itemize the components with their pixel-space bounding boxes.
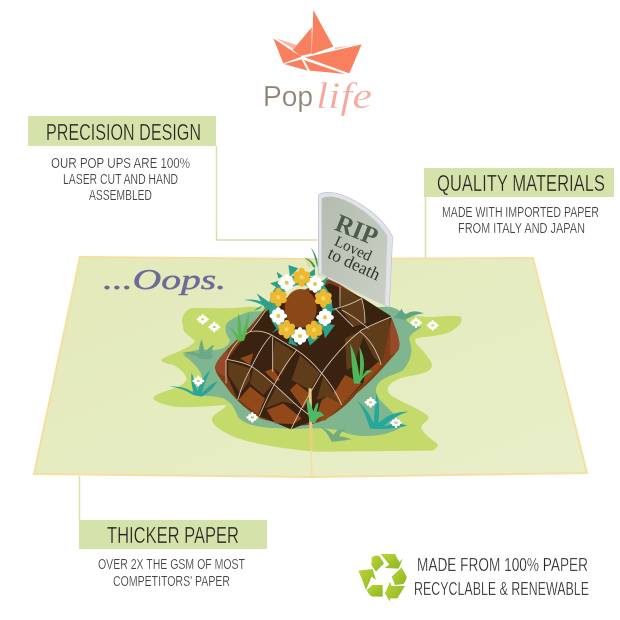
- grass behind stone: [304, 248, 318, 267]
- recycling text: [414, 555, 589, 599]
- green tuft on mound: [350, 343, 372, 384]
- teal tuft right: [357, 393, 408, 429]
- body text: OUR POP UPS ARE 100%: [51, 155, 190, 172]
- dirt cell walls: [227, 283, 392, 429]
- panel: quality materials: [424, 168, 614, 260]
- heading bar: [79, 520, 267, 549]
- wreath flowers: [278, 274, 295, 291]
- panel: thicker paper: [79, 476, 267, 590]
- icon: tombstone: [318, 192, 393, 307]
- grass: dark green blob: [183, 307, 422, 436]
- wordmark: life: [316, 76, 372, 117]
- leader line: [424, 197, 426, 260]
- tombstone inscription: Loved: [332, 233, 375, 265]
- tombstone inscription: [325, 209, 383, 284]
- dirt rim: [215, 317, 399, 377]
- icon: grass tufts: [169, 299, 424, 442]
- wordmark: [263, 76, 372, 117]
- body text: OVER 2X THE GSM OF MOST: [98, 556, 245, 573]
- dirt mound base: [215, 278, 399, 425]
- grass: light green blob: [154, 307, 462, 452]
- card base: [34, 257, 587, 477]
- body text: LASER CUT AND HAND: [63, 171, 178, 188]
- teal tuft behind wreath: [244, 299, 265, 311]
- logo: Poplife origami boat: [263, 10, 372, 117]
- body text: ASSEMBLED: [89, 187, 152, 204]
- body text: [98, 556, 245, 590]
- left tuft: [228, 312, 249, 342]
- panel: precision design: [28, 116, 322, 240]
- pop-up card: [34, 192, 587, 477]
- body text: [442, 204, 599, 237]
- tan fold strip: [310, 388, 311, 450]
- muted tuft left: [182, 339, 214, 359]
- muted tuft front: [320, 427, 352, 442]
- icon: paper boat: [273, 10, 362, 74]
- centre fold: [311, 450, 312, 477]
- leader line: [216, 146, 322, 240]
- dirt cell floors: [238, 353, 382, 424]
- wordmark: Pop: [263, 81, 313, 113]
- panel: recyclable note: [358, 554, 589, 602]
- icon: white daisies: [192, 314, 439, 428]
- tombstone inscription: to death: [325, 244, 383, 284]
- leader line: [78, 476, 80, 520]
- card text: Oops: ...Oops.: [103, 264, 226, 296]
- icon: recycling symbol: [358, 554, 407, 602]
- body text: [51, 155, 190, 204]
- pop-up scene: [154, 192, 462, 452]
- icon: flower wreath: [257, 265, 337, 347]
- heading: PRECISION DESIGN: [46, 119, 201, 145]
- wreath centre: [285, 289, 317, 328]
- muted tuft back right: [393, 308, 424, 320]
- green tuft front: [307, 397, 324, 423]
- body text: COMPETITORS' PAPER: [113, 573, 230, 590]
- tombstone inscription: RIP: [331, 209, 382, 251]
- heading bar: [28, 116, 216, 146]
- teal tuft left: [169, 369, 217, 397]
- dirt grid ribs: [226, 287, 392, 429]
- heading: THICKER PAPER: [107, 522, 239, 548]
- dirt lit walls: [228, 287, 390, 408]
- heading bar: [424, 168, 614, 197]
- wreath leaves: [274, 280, 327, 335]
